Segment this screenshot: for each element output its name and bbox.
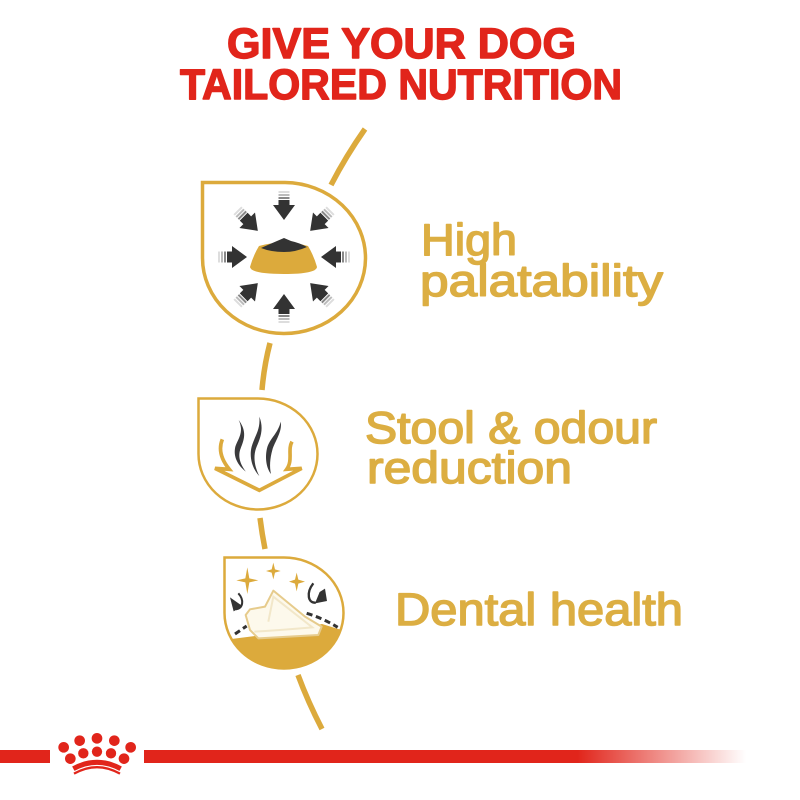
downward arrow [215,439,302,490]
text: stool and odour reduction [365,404,657,493]
connector line segments [260,129,365,729]
drop outline [202,182,366,333]
title: GIVE YOUR DOG [227,21,576,68]
panel: high palatability icon [202,182,366,333]
sparkles [236,563,305,594]
text: dental health: Dental health [395,584,683,635]
text: high palatability: palatability [420,257,664,306]
footer bar left [0,750,50,763]
text: stool and odour reduction: Stool & odour [365,404,657,453]
drop outline [198,398,318,510]
curved arrows [230,583,327,611]
footer bar right [144,750,746,763]
text: stool and odour reduction: reduction [367,444,572,493]
food bowl [250,238,317,274]
panel: stool and odour icon [198,398,318,510]
text: high palatability [420,216,664,306]
kibble [246,591,322,638]
title [180,21,622,109]
panel: dental health icon [223,556,345,670]
odour wisps [235,417,281,476]
title: TAILORED NUTRITION [180,62,622,109]
text: high palatability: High [421,216,517,265]
drop outline [224,558,344,668]
dashed gum line [235,613,338,634]
icon: crown logo [58,733,136,774]
gold base fill [232,624,340,668]
converging arrows [219,192,349,322]
